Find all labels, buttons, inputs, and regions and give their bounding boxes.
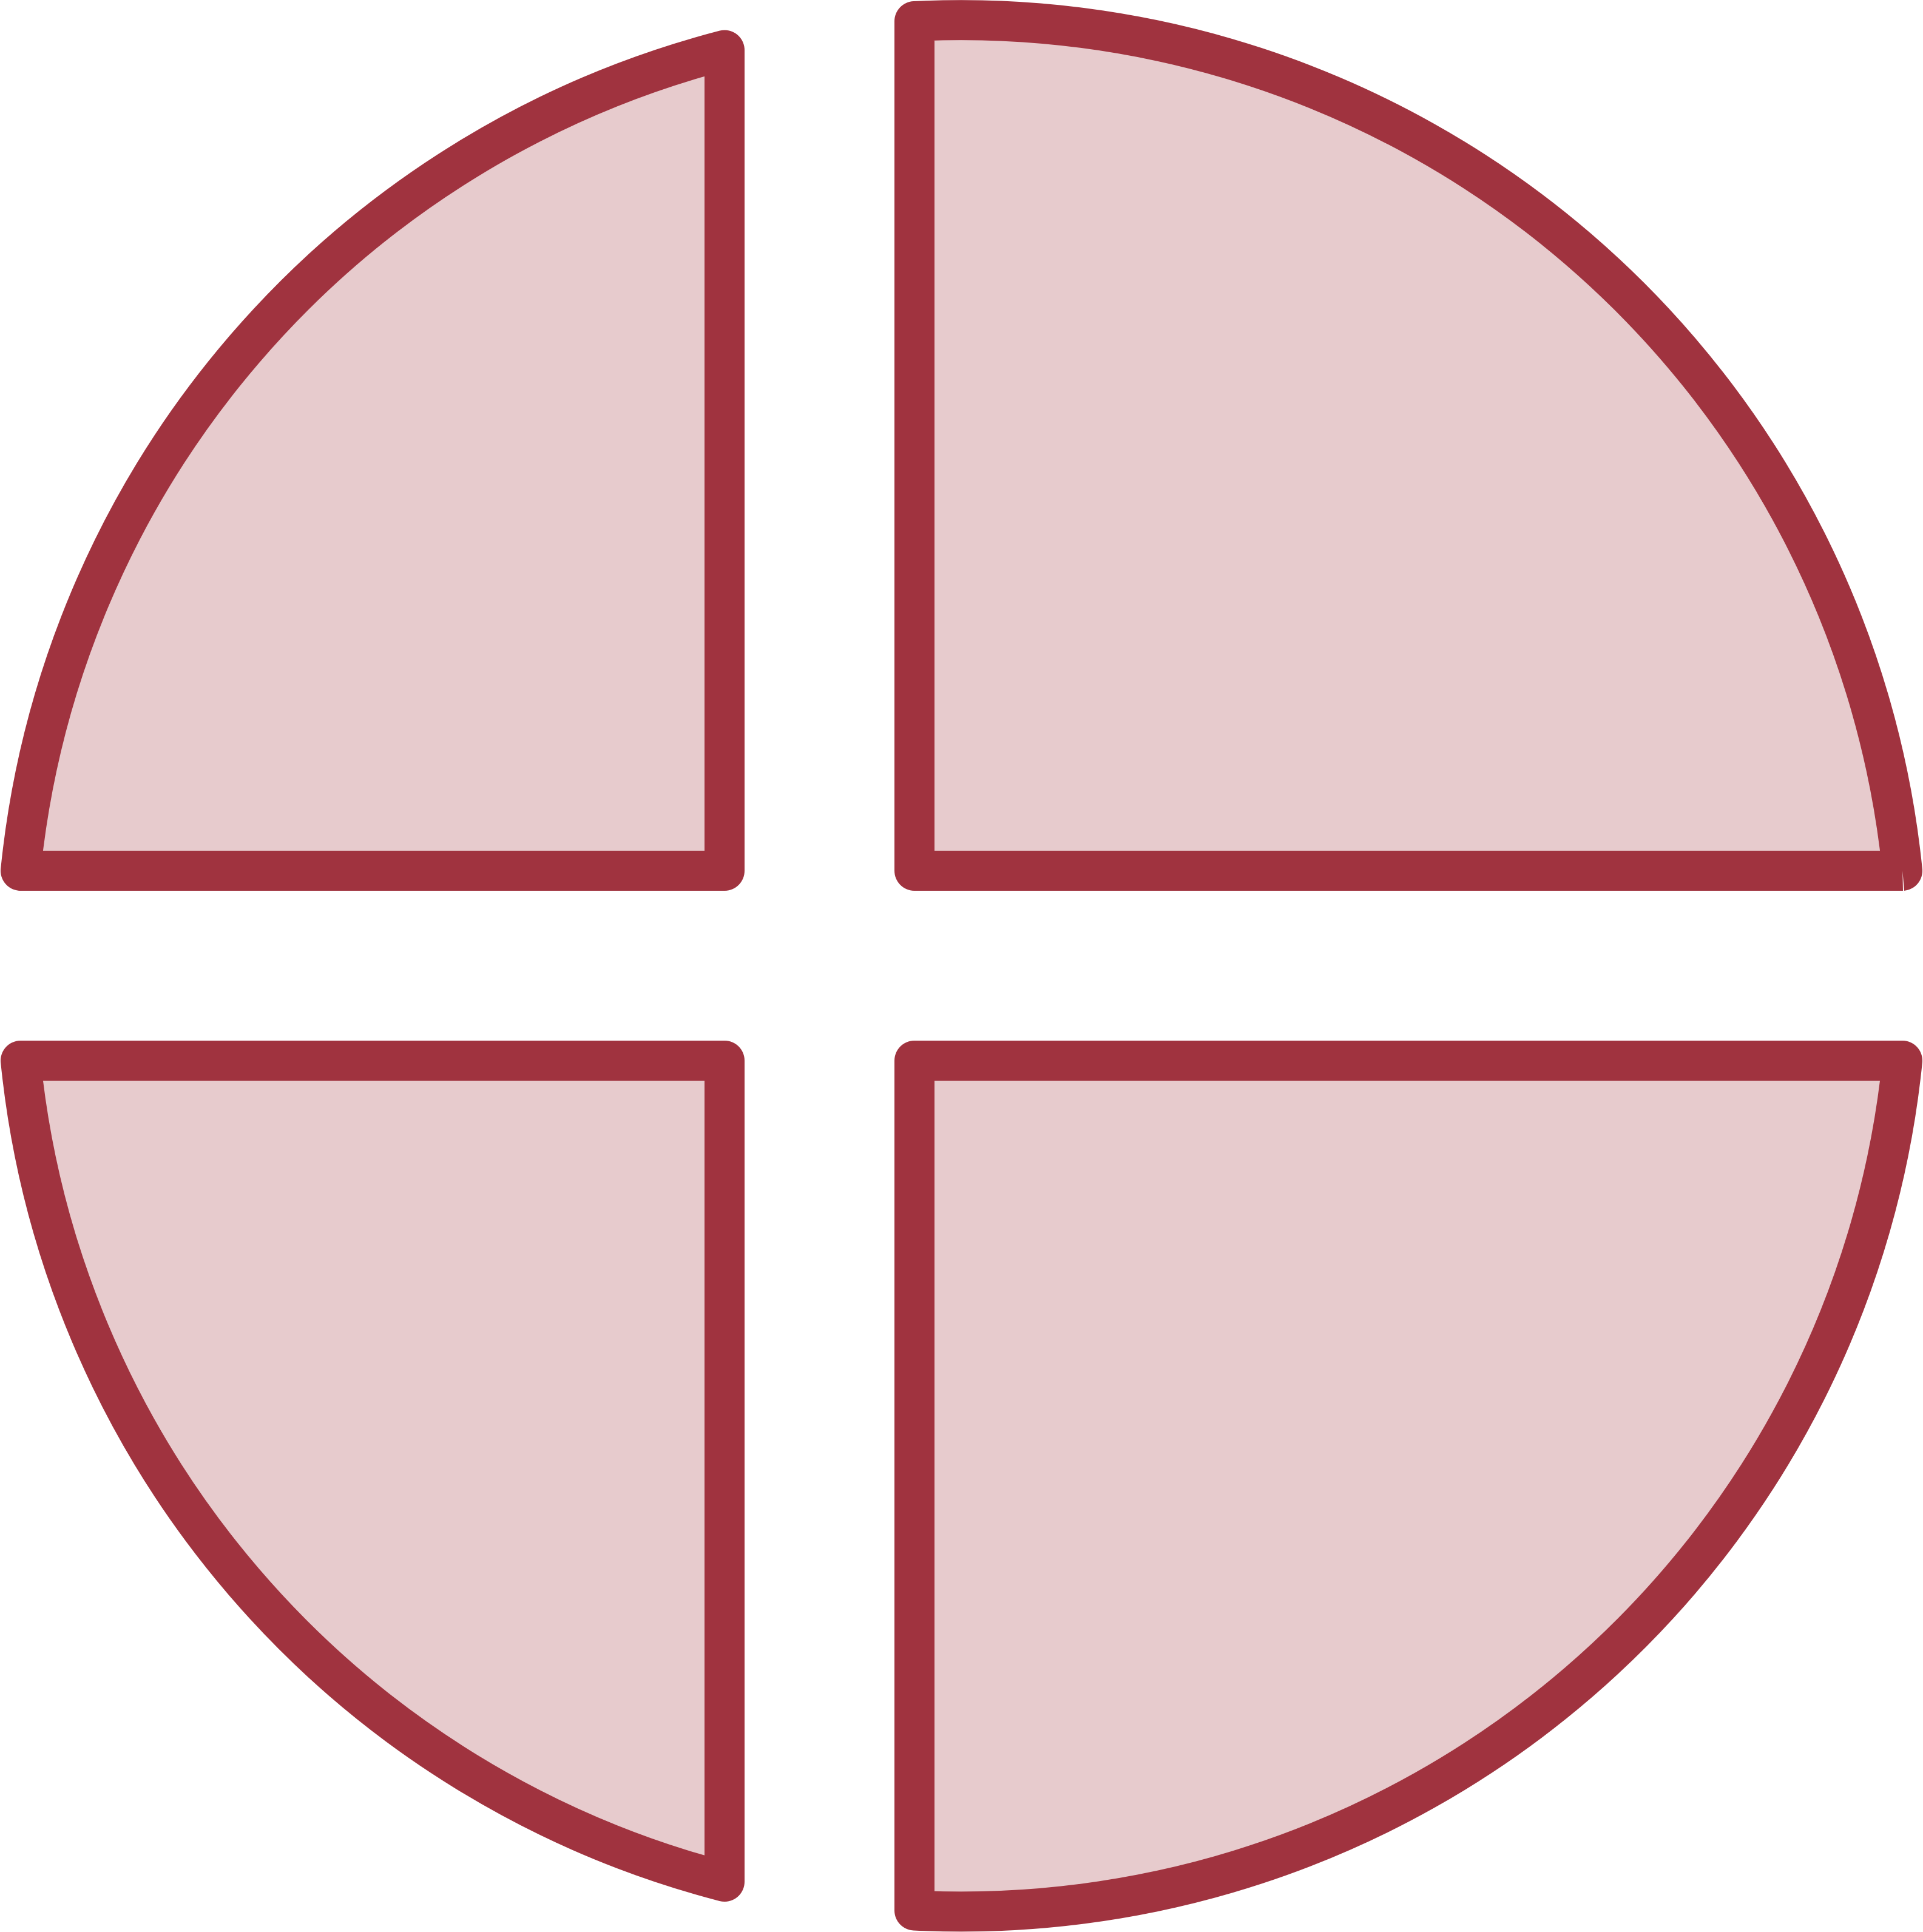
- quadrant: bottom left: [21, 1061, 725, 1882]
- quadrant: bottom right: [914, 1061, 1902, 1911]
- quadrant: top right: [914, 20, 1902, 871]
- hairline seam at top right quadrant corner: [1902, 871, 1904, 891]
- quadrant: top left: [21, 50, 725, 871]
